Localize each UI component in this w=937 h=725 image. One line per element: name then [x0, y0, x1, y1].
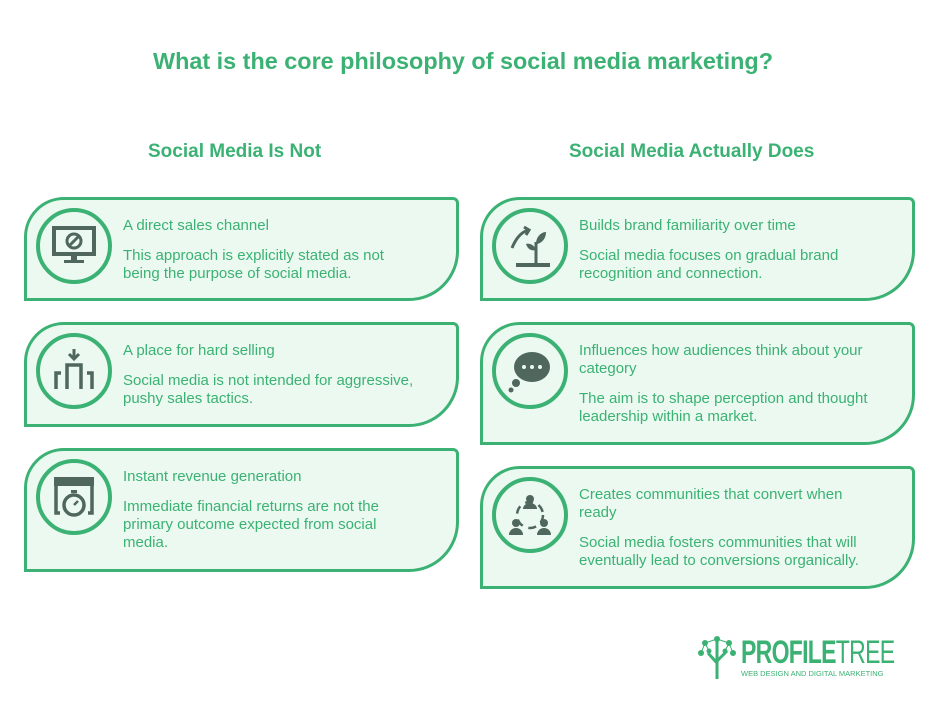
heading: Social Media Actually Does: Social Media Actually Does	[569, 141, 814, 162]
card: instant revenue: Immediate financial returns are not the	[123, 498, 379, 515]
logo: ProfileTree: WEB DESIGN AND DIGITAL MARKETING	[741, 669, 884, 678]
icon: funnel arrow	[36, 333, 112, 409]
icon: community people	[492, 477, 568, 553]
card: instant revenue: Instant revenue generation	[123, 468, 301, 485]
heading: Social Media Is Not: Social Media Is Not	[148, 141, 321, 162]
icon: thought bubble	[492, 333, 568, 409]
card: hard selling	[24, 322, 459, 427]
card: communities: Social media fosters communities that will	[579, 534, 857, 551]
card: brand familiarity	[480, 197, 915, 301]
icon: monitor block	[36, 208, 112, 284]
card: direct sales channel: This approach is explicitly stated as not	[123, 247, 384, 264]
icon: tree	[698, 636, 736, 679]
card: hard selling: A place for hard selling	[123, 342, 275, 359]
card: communities: ready	[579, 504, 617, 521]
card: communities: eventually lead to conversions organically.	[579, 552, 859, 569]
card: brand familiarity: Builds brand familiarity over time	[579, 217, 796, 234]
card: direct sales channel: A direct sales channel	[123, 217, 269, 234]
card: hard selling: pushy sales tactics.	[123, 390, 253, 407]
card: category thinking: The aim is to shape perception and thought	[579, 390, 868, 407]
logo: ProfileTree: PROFILETREE	[741, 634, 894, 670]
card: direct sales channel: being the purpose of social media.	[123, 265, 351, 282]
card: hard selling: Social media is not intended for aggressive,	[123, 372, 413, 389]
logo: ProfileTree	[698, 634, 894, 679]
card: category thinking: leadership within a market.	[579, 408, 757, 425]
card: instant revenue	[24, 448, 459, 572]
card: direct sales channel	[24, 197, 459, 301]
card: category thinking: category	[579, 360, 637, 377]
card: communities	[480, 466, 915, 589]
card: category thinking: Influences how audiences think about your	[579, 342, 863, 359]
icon: browser stopwatch	[36, 459, 112, 535]
card: instant revenue: media.	[123, 534, 168, 551]
title: What is the core philosophy of social media marketing?	[153, 48, 773, 74]
card: instant revenue: primary outcome expected from social	[123, 516, 376, 533]
card: category thinking	[480, 322, 915, 445]
card: communities: Creates communities that convert when	[579, 486, 842, 503]
icon: sprout growth	[492, 208, 568, 284]
card: brand familiarity: Social media focuses on gradual brand	[579, 247, 838, 264]
card: brand familiarity: recognition and connection.	[579, 265, 762, 282]
